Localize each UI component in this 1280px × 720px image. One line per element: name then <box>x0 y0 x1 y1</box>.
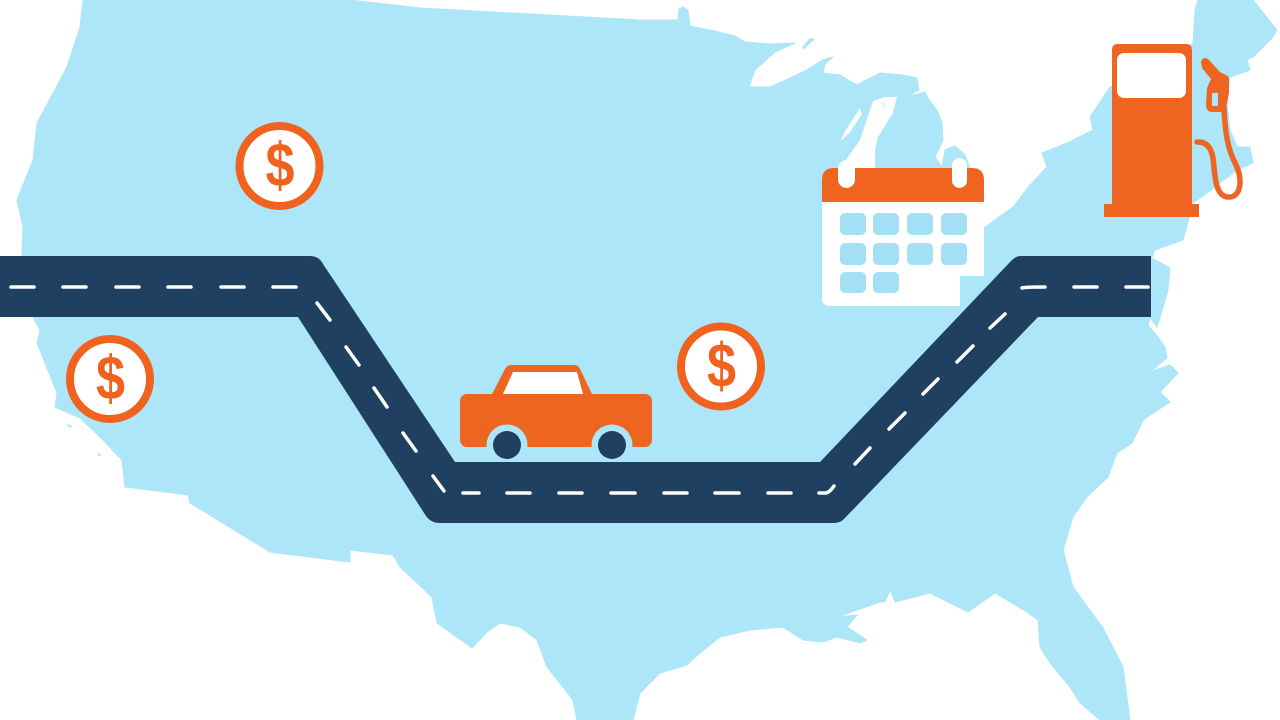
icon: gas pump <box>1104 44 1240 217</box>
icon: dollar coin top left: $ <box>266 131 295 201</box>
icon: dollar coin by car: $ <box>707 332 736 401</box>
icon: dollar coin bottom left: $ <box>96 344 125 414</box>
road <box>0 256 1151 523</box>
icon: dollar coin bottom left <box>70 339 150 419</box>
calendar day cells <box>840 213 967 293</box>
icon: dollar coin by car <box>681 326 761 406</box>
road centre dashes <box>11 287 1148 493</box>
icon: dollar coin top left <box>240 126 320 206</box>
icon: car <box>460 365 652 466</box>
icon: calendar <box>822 158 984 306</box>
